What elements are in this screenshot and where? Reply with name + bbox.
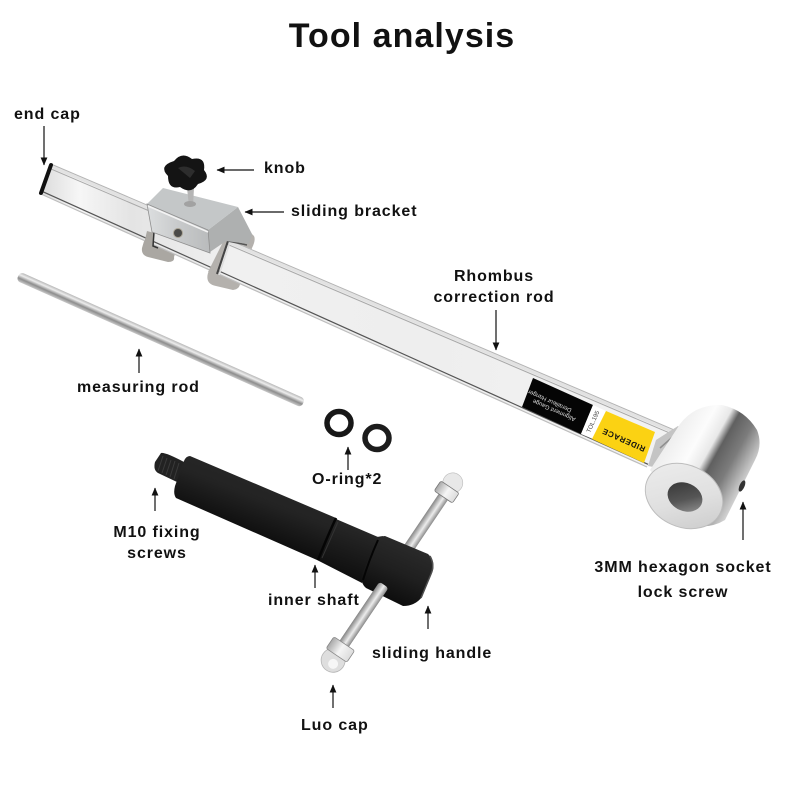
arrow and label: rhombus correction rod: Rhombus [454, 268, 534, 285]
arrow and label: knob [217, 160, 306, 177]
M10 fixing screw thread [154, 453, 184, 482]
label: white tolerance tag: TOL.195 [586, 410, 602, 434]
label: black gauge decal: Alignment Gauge [531, 397, 577, 422]
top nut [434, 481, 459, 503]
left clip front tab [143, 231, 154, 248]
arrow and label: inner shaft: inner shaft [268, 592, 360, 609]
knob [164, 155, 207, 207]
clip: left lower, behind rod [142, 231, 180, 262]
O-ring 1 [327, 412, 351, 434]
O-ring 2 [365, 426, 389, 450]
arrow and label: 3MM hexagon socket lock screw: 3MM hexagon socket [594, 559, 772, 576]
front face [635, 451, 733, 541]
arrow and label: knob: knob [264, 160, 306, 177]
bottom dome [316, 644, 350, 677]
label: black gauge decal [522, 378, 593, 434]
arrow and label: 3MM hexagon socket lock screw: lock screw [638, 584, 728, 601]
label: black gauge decal: Derailleur Hanger [527, 388, 573, 413]
arrow and label: Luo cap: Luo cap [301, 717, 369, 734]
sliding handle body [362, 536, 433, 606]
arrow and label: end cap: end cap [14, 106, 81, 123]
arrow and label: sliding handle [372, 606, 492, 662]
weld [648, 426, 695, 470]
label: white tolerance tag [581, 405, 606, 439]
arrow and label: 3MM hexagon socket lock screw [594, 502, 772, 601]
sliding handle rod and upper Luo cap [332, 468, 468, 655]
bracket right side [208, 207, 252, 252]
arrow and label: measuring rod: measuring rod [77, 379, 200, 396]
lock screw hole [737, 480, 747, 492]
top dome [439, 469, 467, 497]
hexagon socket cylinder head [635, 405, 760, 541]
bracket top face [147, 188, 238, 230]
end cap [41, 165, 51, 193]
inner shaft [174, 456, 383, 583]
arrow and label: M10 fixing screws: M10 fixing [113, 524, 201, 541]
arrow and label: M10 fixing screws [113, 488, 201, 562]
socket hole [663, 477, 707, 517]
clip: right lower, behind rod [207, 224, 255, 290]
right clip front tab [208, 240, 229, 275]
bracket front face [147, 204, 210, 253]
arrow and label: inner shaft [268, 565, 360, 609]
cylinder body [650, 405, 760, 526]
measuring rod [16, 272, 305, 407]
title: Tool analysis [289, 17, 515, 55]
sliding handle rod lower section and Luo cap [316, 578, 394, 677]
arrow and label: O-ring [312, 447, 382, 488]
arrow and label: end cap [14, 106, 81, 165]
sliding bracket [143, 188, 252, 275]
left clip slot [153, 232, 158, 248]
bracket hole [174, 228, 182, 238]
label: yellow brand decal [592, 411, 655, 463]
arrow and label: M10 fixing screws: screws [127, 545, 187, 562]
arrow and label: O-ring: O-ring*2 [312, 471, 382, 488]
rhombus correction rod [41, 164, 680, 467]
arrow and label: Luo cap [301, 685, 369, 734]
label: yellow brand decal: RIDERACE [601, 426, 647, 453]
arrow and label: sliding handle: sliding handle [372, 645, 492, 662]
arrow and label: rhombus correction rod: correction rod [433, 289, 555, 306]
O-rings [327, 412, 389, 450]
arrow and label: rhombus correction rod [433, 268, 555, 350]
right clip strap [217, 241, 228, 274]
arrow and label: sliding bracket: sliding bracket [291, 203, 417, 220]
arrow and label: measuring rod [77, 349, 200, 396]
bottom nut [326, 637, 355, 662]
